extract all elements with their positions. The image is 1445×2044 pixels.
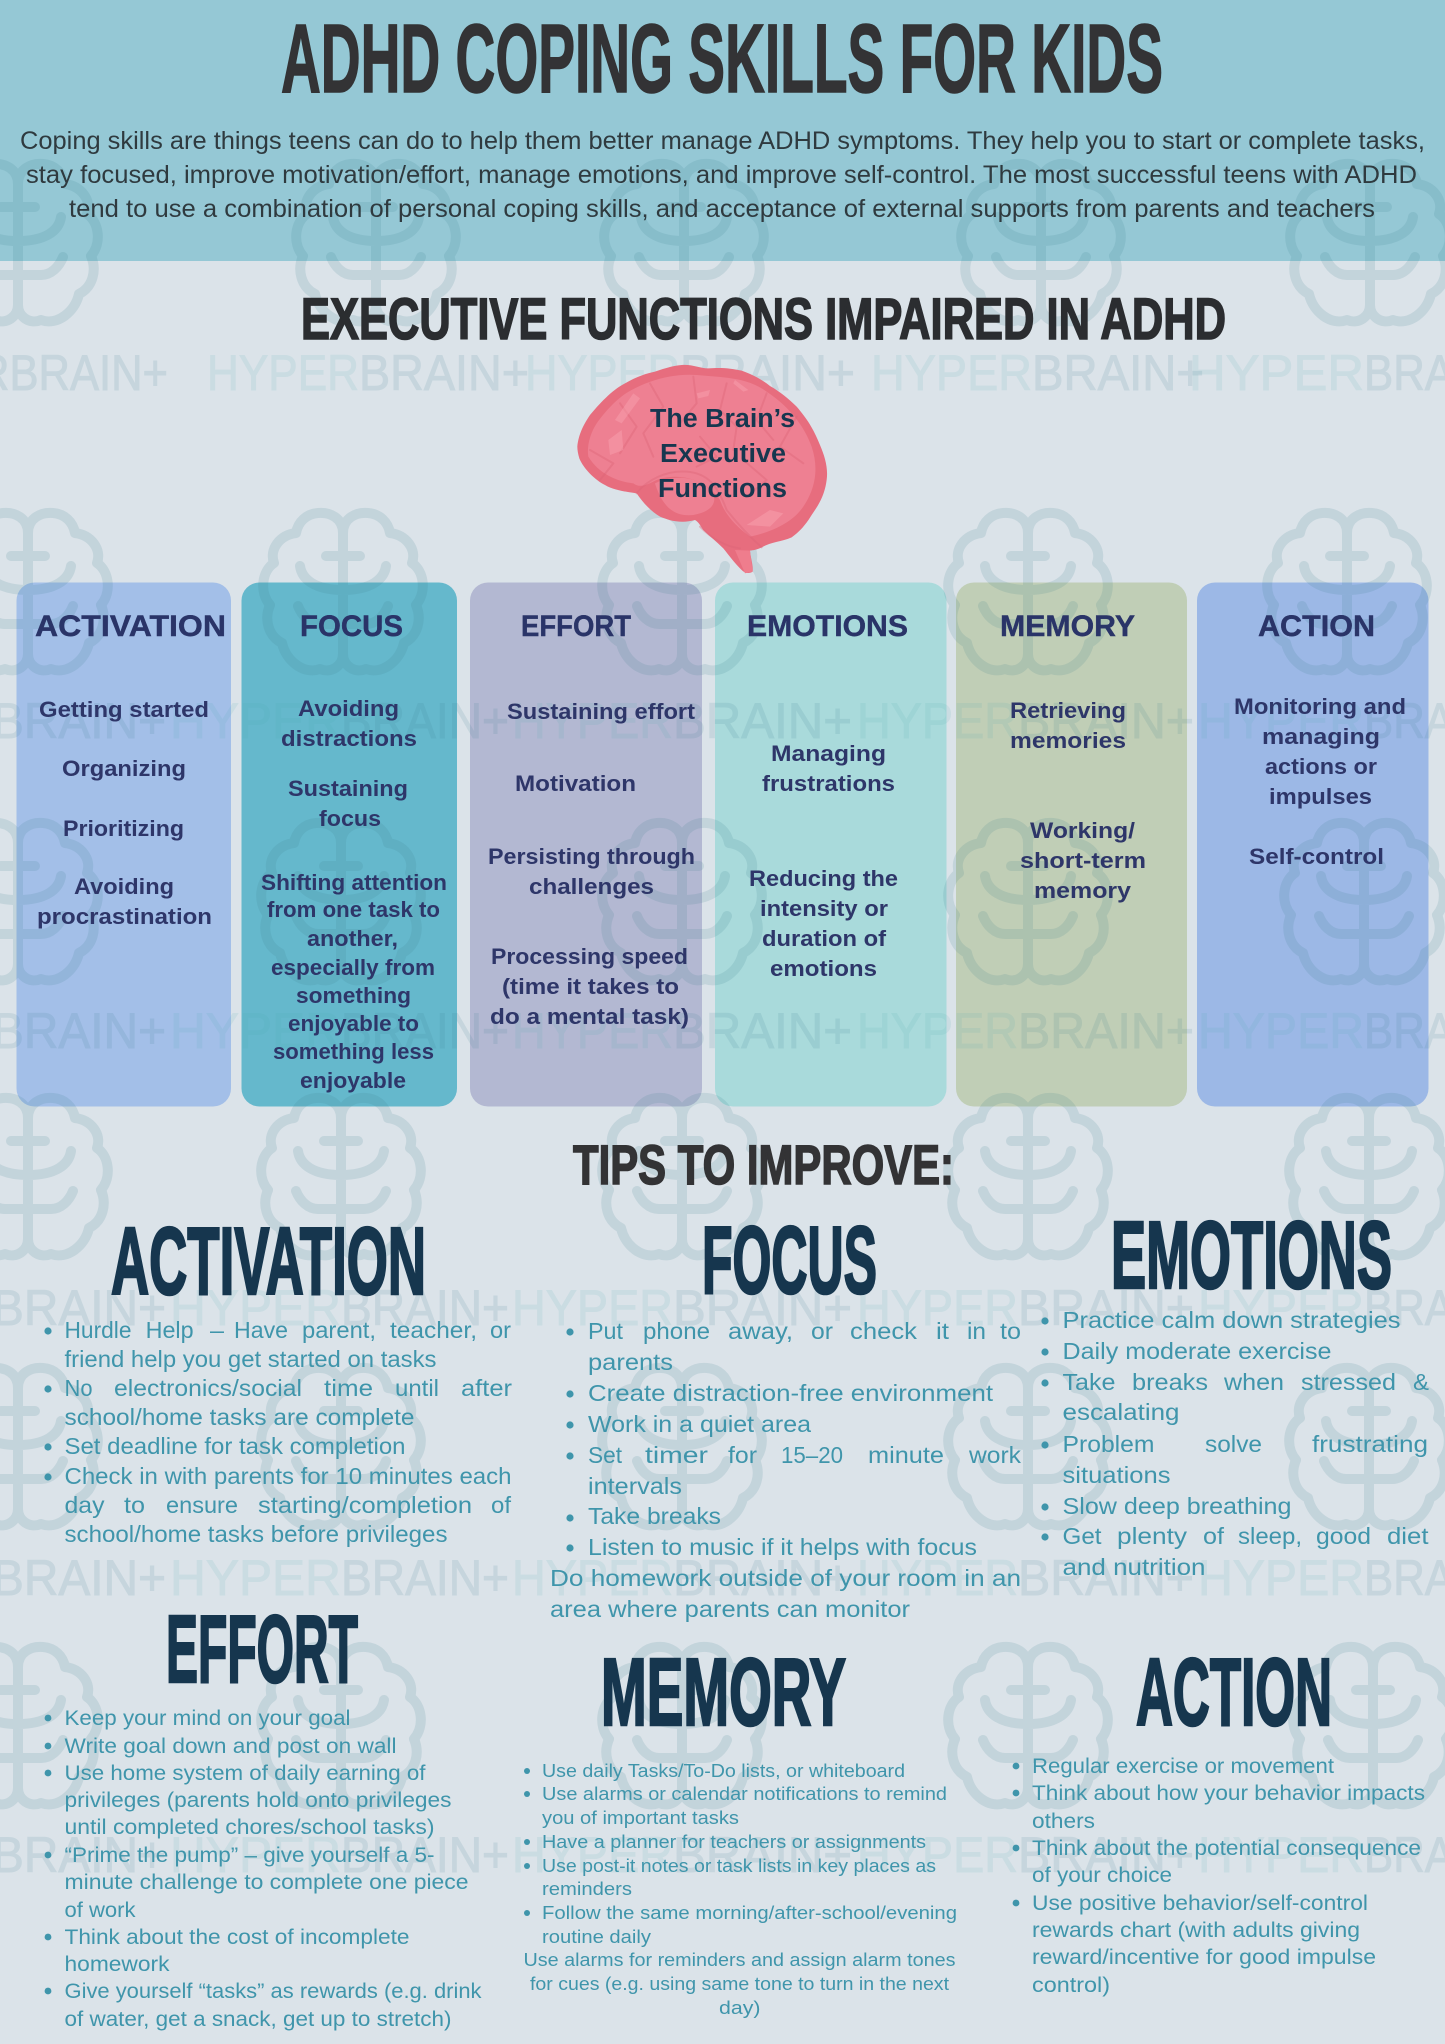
card text — [37, 697, 212, 929]
tips list: Check in with parents for 10 minutes each — [64, 1463, 512, 1489]
watermark: word rows: BRAIN+ — [1032, 345, 1204, 401]
tips list: work — [968, 1442, 1022, 1468]
watermark: word rows: BRAIN+ — [673, 693, 852, 749]
watermark: word rows: HYPER — [512, 1827, 673, 1883]
card text — [749, 741, 898, 981]
card text — [261, 696, 447, 1093]
tips list: teacher, — [390, 1317, 477, 1343]
tips list: of — [1203, 1523, 1225, 1549]
watermark: word rows: HYPER — [857, 1280, 1018, 1336]
card text: emotions — [770, 956, 877, 981]
card text: memories — [1010, 728, 1126, 753]
watermark: word rows: BRAIN+ — [341, 693, 509, 749]
watermark: word rows: BRAIN+ — [1018, 1550, 1194, 1606]
card heading: ACTIVATION — [35, 610, 226, 643]
tips list: minute challenge to complete one piece — [64, 1871, 468, 1894]
watermark: word rows: HYPER — [512, 1550, 673, 1606]
tips heading: EFFORT — [166, 1596, 358, 1703]
tips list: solve — [1205, 1431, 1262, 1457]
card text: procrastination — [37, 904, 212, 929]
tips list: friend help you get started on tasks — [64, 1346, 436, 1372]
watermark: word rows: HYPER — [871, 345, 1032, 401]
watermark: word rows: BRAIN+ — [341, 1003, 509, 1059]
tips list: it — [936, 1318, 950, 1344]
tips list: Get — [1062, 1523, 1102, 1549]
watermark: word rows: HYPER — [170, 1550, 341, 1606]
card text: Sustaining — [288, 776, 408, 801]
tips list: school/home tasks before privileges — [64, 1521, 448, 1547]
tips list: frustrating — [1312, 1431, 1428, 1457]
card text: Organizing — [62, 756, 186, 781]
tips list: to — [1000, 1318, 1021, 1344]
tips list: Do homework outside of your room in an — [550, 1565, 1021, 1591]
card text: duration of — [762, 926, 887, 951]
tips list: in — [967, 1318, 986, 1344]
card text: Processing speed — [491, 944, 688, 969]
watermark: word rows: HYPER — [512, 1003, 673, 1059]
tips list: Take breaks — [588, 1503, 721, 1529]
tips list: Give yourself “tasks” as rewards (e.g. drink — [64, 1980, 482, 2003]
brain label: The Brain’s — [650, 405, 795, 433]
tips list: Slow deep breathing — [1062, 1493, 1292, 1519]
tips list: breaks — [1132, 1369, 1208, 1395]
tips list: school/home tasks are complete — [64, 1404, 414, 1430]
tips list: Put — [588, 1318, 624, 1344]
tips list: Use alarms for reminders and assign alarm tones — [524, 1950, 956, 1970]
tips list: 15–20 — [781, 1442, 843, 1468]
card text: from one task to — [267, 897, 440, 922]
tips list: you of important tasks — [542, 1808, 739, 1828]
tips list: plenty — [1117, 1523, 1188, 1549]
card text: something less — [273, 1039, 434, 1064]
card heading: MEMORY — [1000, 610, 1135, 643]
watermark: word rows: HYPER — [512, 1280, 673, 1336]
tips list: Set deadline for task completion — [64, 1433, 405, 1459]
tips list: control) — [1032, 1974, 1110, 1997]
tips list: No — [64, 1375, 92, 1401]
tips list: reminders — [542, 1879, 632, 1899]
watermark: word rows: HYPER — [857, 1827, 1018, 1883]
tips list: intervals — [588, 1473, 682, 1499]
tips list — [524, 1761, 957, 2018]
tips list: Use post-it notes or task lists in key places as — [542, 1856, 936, 1876]
card: emotions — [747, 610, 908, 981]
tips list: Think about how your behavior impacts — [1032, 1782, 1425, 1805]
card text: Managing — [771, 741, 886, 766]
card heading: EMOTIONS — [747, 610, 908, 643]
watermark: word rows: BRAIN+ — [673, 1003, 852, 1059]
card text: memory — [1034, 878, 1132, 903]
card text: Getting started — [39, 697, 209, 722]
card text: enjoyable to — [288, 1011, 419, 1036]
tips heading: MEMORY — [601, 1639, 846, 1746]
tips list: when — [1223, 1369, 1284, 1395]
card text: impulses — [1269, 784, 1372, 809]
card: focus — [261, 610, 447, 1093]
watermark: word rows: HYPER — [525, 345, 680, 401]
illustration: brain — [577, 365, 827, 573]
tips list: Write goal down and post on wall — [64, 1735, 396, 1758]
tips list: Practice calm down strategies — [1062, 1307, 1400, 1333]
card text: (time it takes to — [502, 974, 679, 999]
tips: effort — [45, 1596, 482, 2031]
brain label: Executive — [660, 440, 786, 468]
watermark: word rows: HYPER — [170, 1003, 341, 1059]
card text: Motivation — [515, 771, 636, 796]
watermark: word rows: HYPER — [170, 1827, 341, 1883]
watermark: word rows — [0, 345, 1445, 1883]
tips list: Set — [588, 1442, 623, 1468]
card text: enjoyable — [300, 1068, 406, 1093]
card text — [488, 699, 696, 1029]
watermark: word rows: BRAIN+ — [673, 1280, 852, 1336]
tips list: Think about the cost of incomplete — [64, 1926, 410, 1949]
card: activation — [35, 610, 226, 929]
tips list: of work — [64, 1899, 136, 1922]
tips list: until — [395, 1375, 439, 1401]
watermark: word rows: BRAIN+ — [1018, 1280, 1194, 1336]
card text: Working/ — [1030, 818, 1136, 843]
card heading: EFFORT — [521, 610, 631, 643]
header band — [0, 0, 1445, 261]
tips list: Hurdle — [64, 1317, 132, 1343]
tips list: timer — [645, 1442, 708, 1468]
tips list: Take — [1062, 1369, 1116, 1395]
tips list: Have — [234, 1317, 288, 1343]
watermark: word rows: HYPER — [170, 693, 341, 749]
tips list: routine daily — [542, 1927, 651, 1947]
card text: Retrieving — [1010, 698, 1126, 723]
brain label — [650, 405, 795, 503]
watermark: word rows: BRAIN+ — [341, 1280, 509, 1336]
tips list: away, — [728, 1318, 793, 1344]
card text: challenges — [529, 874, 654, 899]
watermark: word rows: HYPER — [512, 693, 673, 749]
card text: Avoiding — [298, 696, 399, 721]
card text — [1010, 698, 1146, 903]
tips list: starting/completion — [258, 1492, 472, 1518]
watermark: word rows: BRAIN+ — [341, 1550, 509, 1606]
tips list: Create distraction-free environment — [588, 1380, 994, 1406]
intro paragraph — [20, 127, 1425, 223]
tips list: stressed — [1301, 1369, 1396, 1395]
tips list: Keep your mind on your goal — [64, 1707, 350, 1730]
tips list: check — [850, 1318, 918, 1344]
tips: activation — [44, 1208, 512, 1547]
tips list: and nutrition — [1062, 1554, 1206, 1580]
tips list: others — [1032, 1810, 1095, 1833]
tips list: Use home system of daily earning of — [64, 1762, 426, 1785]
tips list: reward/incentive for good impulse — [1032, 1946, 1376, 1969]
tips list: sleep, — [1238, 1523, 1302, 1549]
tips list: for cues (e.g. using same tone to turn in the next — [530, 1974, 949, 1994]
tips list: of — [491, 1492, 512, 1518]
tips list: Use positive behavior/self-control — [1032, 1892, 1368, 1915]
tips list: minute — [868, 1442, 944, 1468]
tips heading: FOCUS — [702, 1207, 877, 1314]
tips list: homework — [64, 1953, 170, 1976]
watermark: word rows: BRAIN+ — [673, 1550, 852, 1606]
card: memory — [1000, 610, 1146, 903]
card text: focus — [319, 806, 381, 831]
tips list: good — [1316, 1523, 1371, 1549]
card text: Shifting attention — [261, 870, 447, 895]
watermark: word rows: HYPER — [857, 693, 1018, 749]
tips list: of water, get a snack, get up to stretch) — [64, 2008, 451, 2031]
tips: focus — [550, 1207, 1022, 1622]
card text: frustrations — [762, 771, 895, 796]
card text: Reducing the — [749, 866, 898, 891]
watermark: word rows: BRAIN+ — [341, 1827, 509, 1883]
card text: another, — [307, 926, 398, 951]
tips list: of your choice — [1032, 1864, 1172, 1887]
tips list: Follow the same morning/after-school/evening — [542, 1903, 957, 1923]
tips list: rewards chart (with adults giving — [1032, 1919, 1360, 1942]
card: effort — [488, 610, 696, 1029]
card text: do a mental task) — [490, 1004, 689, 1029]
tips list: ensure — [166, 1492, 238, 1518]
tips: emotions — [1041, 1202, 1429, 1580]
watermark: word rows: HYPER — [1189, 345, 1364, 401]
tips list: parents — [588, 1349, 673, 1375]
tips list: privileges (parents hold onto privileges — [64, 1789, 452, 1812]
intro paragraph: stay focused, improve motivation/effort, manage emotions, and improve self-control. The most successful teens with ADHD — [26, 161, 1417, 189]
tips list: area where parents can monitor — [550, 1596, 910, 1622]
tips list: diet — [1387, 1523, 1429, 1549]
card text: managing — [1262, 724, 1380, 749]
intro paragraph: Coping skills are things teens can do to help them better manage ADHD symptoms. They help you to start or complete tasks, — [20, 127, 1425, 155]
tips list: Have a planner for teachers or assignments — [542, 1832, 926, 1852]
card text: Self-control — [1249, 844, 1384, 869]
intro paragraph: tend to use a combination of personal coping skills, and acceptance of external supports from parents and teachers — [69, 195, 1375, 223]
tips: action — [1013, 1639, 1425, 1997]
card text: Monitoring and — [1234, 694, 1406, 719]
watermark: word rows: BRAIN+ — [1018, 1003, 1194, 1059]
tips list: to — [124, 1492, 145, 1518]
tips list — [1041, 1307, 1429, 1580]
tips list: after — [461, 1375, 512, 1401]
tips list: situations — [1062, 1462, 1170, 1488]
brain label: Functions — [658, 475, 787, 503]
watermark: word rows: HYPER — [1198, 693, 1364, 749]
watermark: word rows: HYPER — [207, 345, 359, 401]
card: action — [1234, 610, 1406, 869]
card text: Persisting through — [488, 844, 695, 869]
tips list — [45, 1707, 482, 2031]
watermark: word rows: HYPER — [857, 1550, 1018, 1606]
tips list: & — [1413, 1369, 1429, 1395]
tips list: for — [728, 1442, 757, 1468]
tips list: “Prime the pump” – give yourself a 5- — [64, 1844, 434, 1867]
tips list — [44, 1317, 512, 1547]
watermark: word rows: BRAIN+ — [1018, 1827, 1194, 1883]
card text: Avoiding — [74, 874, 174, 899]
watermark: word rows: BRAIN+ — [1018, 693, 1194, 749]
tips list: or — [811, 1318, 833, 1344]
card text: something — [296, 983, 411, 1008]
tips list: day) — [719, 1998, 760, 2018]
tips list: Work in a quiet area — [588, 1411, 811, 1437]
watermark: word rows: HYPER — [857, 1003, 1018, 1059]
card text — [1234, 694, 1406, 869]
tips list — [550, 1318, 1022, 1622]
tips list: time — [324, 1375, 373, 1401]
tips list: phone — [643, 1318, 710, 1344]
tips list: Regular exercise or movement — [1032, 1755, 1334, 1778]
card heading: ACTION — [1258, 610, 1375, 643]
tips list: Help — [146, 1317, 194, 1343]
tips: memory — [524, 1639, 957, 2018]
card text: actions or — [1265, 754, 1377, 779]
card text: short-term — [1020, 848, 1146, 873]
panel: executive function cards — [16, 582, 1428, 1106]
card text: Sustaining effort — [507, 699, 696, 724]
watermark: word rows: HYPER — [1198, 1280, 1364, 1336]
tips list: Problem — [1062, 1431, 1154, 1457]
tips list: Listen to music if it helps with focus — [588, 1534, 977, 1560]
watermark: word rows: HYPER — [1198, 1550, 1364, 1606]
tips list: or — [490, 1317, 511, 1343]
tips list: Think about the potential consequence — [1032, 1837, 1421, 1860]
tips list: day — [64, 1492, 105, 1518]
card text: intensity or — [760, 896, 888, 921]
tips list: electronics/social — [114, 1375, 302, 1401]
watermark: word rows: HYPER — [1198, 1827, 1364, 1883]
card text: distractions — [281, 726, 417, 751]
tips list: – — [210, 1317, 224, 1343]
tips heading: ACTIVATION — [111, 1208, 426, 1315]
watermark: word rows: HYPER — [170, 1280, 341, 1336]
tips list: escalating — [1062, 1399, 1180, 1425]
watermark: word rows: HYPER — [1198, 1003, 1364, 1059]
card text: especially from — [271, 955, 435, 980]
tips list: until completed chores/school tasks) — [64, 1816, 434, 1839]
tips list — [1013, 1755, 1425, 1997]
tips list: Use alarms or calendar notifications to remind — [542, 1784, 947, 1804]
heading: tips to improve: TIPS TO IMPROVE: — [573, 1133, 954, 1196]
watermark: word rows: BRAIN+ — [673, 1827, 852, 1883]
card heading: FOCUS — [300, 610, 403, 643]
card text: Prioritizing — [63, 816, 184, 841]
watermark: word rows: BRAIN+ — [680, 345, 855, 401]
tips list: parent, — [302, 1317, 376, 1343]
watermark: word rows: BRAIN+ — [359, 345, 529, 401]
tips list: Use daily Tasks/To-Do lists, or whiteboard — [542, 1761, 905, 1781]
tips list: Daily moderate exercise — [1062, 1338, 1332, 1364]
